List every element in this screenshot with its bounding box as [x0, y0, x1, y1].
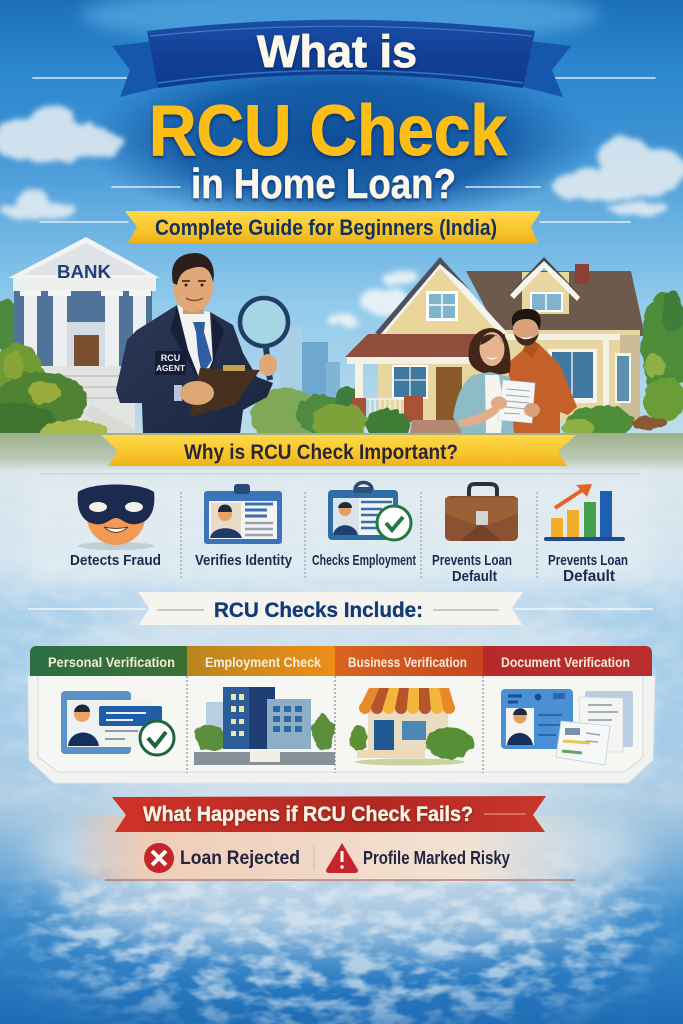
centre trees	[251, 386, 360, 444]
bank label: BANK	[57, 262, 111, 282]
rcu checks ribbon	[138, 592, 523, 625]
why heading: Why is RCU Check Important?	[184, 441, 458, 464]
scene: bank, agent, house and couple	[0, 237, 683, 446]
magnifying glass	[240, 298, 288, 380]
header: Personal Verification	[48, 655, 175, 670]
gable window	[426, 291, 458, 321]
icon: id with tick	[61, 691, 174, 755]
label: Verifies Identity	[195, 552, 293, 569]
subtitle text: Complete Guide for Beginners (India)	[155, 215, 497, 240]
house	[345, 257, 645, 434]
column: document verification	[483, 646, 652, 765]
suit	[116, 305, 273, 434]
item: prevents loan default (briefcase)	[432, 484, 518, 585]
label: Detects Fraud	[70, 552, 161, 569]
column: business verification	[335, 646, 483, 766]
header	[30, 646, 187, 676]
icon: masked face	[78, 484, 154, 550]
bank	[8, 237, 160, 434]
heading: RCU Check: RCU Check	[149, 92, 507, 171]
side window	[615, 353, 631, 403]
dormer	[522, 272, 569, 314]
icon: shop	[349, 688, 473, 766]
background skyscrapers	[280, 327, 340, 417]
icon: warning triangle	[326, 843, 358, 873]
why section dividers	[181, 492, 537, 578]
icon: documents	[501, 689, 633, 765]
sky glow	[80, 0, 600, 45]
sky clouds behind house	[327, 270, 416, 327]
pale cloud bank at bottom	[60, 860, 620, 950]
header: Document Verification	[501, 655, 630, 670]
ribbon main	[147, 20, 535, 88]
column dividers	[187, 676, 483, 773]
ribbon tails	[112, 41, 168, 97]
heading: What is: What is	[257, 26, 417, 77]
document	[498, 380, 535, 423]
railing	[366, 399, 404, 419]
icon: bar chart	[544, 484, 625, 541]
mottled clouds at bottom	[20, 825, 660, 1024]
walls	[378, 330, 640, 422]
RCU agent	[116, 253, 288, 434]
label: Prevents Loan	[432, 552, 512, 569]
lapels	[170, 307, 200, 382]
RCU agent badge: RCU	[161, 353, 180, 363]
left bushes	[0, 344, 108, 446]
heading: RCU Checks Include:	[214, 599, 423, 622]
label	[548, 552, 628, 585]
porch column	[355, 364, 363, 400]
door	[436, 367, 462, 420]
header	[187, 646, 335, 676]
clipboard	[174, 365, 260, 417]
icon: briefcase	[445, 484, 518, 541]
woman	[453, 328, 514, 434]
header	[483, 646, 652, 676]
item: detects fraud	[70, 484, 161, 569]
item: checks employment	[312, 482, 416, 569]
heading: in Home Loan?: in Home Loan?	[191, 160, 456, 207]
pale centre behind lower sections	[40, 580, 640, 820]
large right window	[548, 349, 597, 403]
porch window	[392, 365, 428, 399]
mid sky wisps	[0, 470, 683, 800]
clouds: upper sky	[0, 104, 683, 219]
dark blue title halo	[85, 52, 595, 228]
roof trim	[505, 334, 620, 340]
text: profile marked risky: Profile Marked Risky	[363, 848, 510, 868]
label	[432, 552, 512, 585]
failure items	[144, 843, 510, 873]
left trees	[0, 299, 20, 351]
chimney	[575, 264, 589, 284]
steps	[410, 420, 462, 434]
head	[183, 298, 204, 314]
divider	[313, 846, 315, 870]
porch roof	[345, 334, 507, 357]
awning stripes	[359, 688, 455, 714]
icon: office buildings	[194, 687, 335, 765]
title ribbon	[112, 20, 571, 97]
man	[508, 309, 577, 434]
column: employment check	[187, 646, 335, 765]
failure heading: What Happens if RCU Check Fails?	[143, 803, 473, 826]
header	[335, 646, 483, 676]
soft panel background	[30, 478, 650, 583]
icon: rejected cross	[144, 843, 174, 873]
label: Prevents Loan	[548, 552, 628, 569]
label: Checks Employment	[312, 552, 416, 569]
pale glow behind failure section	[30, 795, 650, 905]
failure band	[70, 816, 600, 880]
RCU agent badge	[155, 351, 186, 375]
label: Default	[452, 568, 497, 585]
panel body	[28, 676, 655, 783]
decorative title lines	[33, 78, 655, 222]
subtitle ribbon	[125, 211, 541, 243]
decorative lines beside ribbon	[28, 608, 653, 610]
text: loan rejected: Loan Rejected	[180, 848, 300, 869]
band bottom line	[105, 879, 575, 881]
why banner	[101, 435, 576, 466]
RCU agent badge: AGENT	[156, 364, 185, 373]
right trees	[641, 292, 683, 422]
item: prevents loan default (chart)	[544, 484, 628, 585]
column: personal verification	[30, 646, 187, 755]
divider under banner	[40, 473, 640, 475]
back roof	[466, 271, 645, 336]
header: Business Verification	[348, 655, 467, 670]
label: Default	[563, 568, 616, 585]
item: verifies identity	[195, 484, 293, 569]
tie	[193, 322, 212, 375]
couple	[453, 309, 577, 434]
icon: id card	[204, 484, 282, 544]
panel: checks included	[28, 646, 655, 783]
grass strip	[0, 433, 683, 470]
failure ribbon	[112, 796, 546, 832]
header: Employment Check	[205, 655, 321, 670]
icon: id card with tick	[328, 482, 411, 540]
shirt	[177, 305, 213, 380]
bushes near house	[312, 403, 668, 441]
main gable	[385, 263, 505, 330]
